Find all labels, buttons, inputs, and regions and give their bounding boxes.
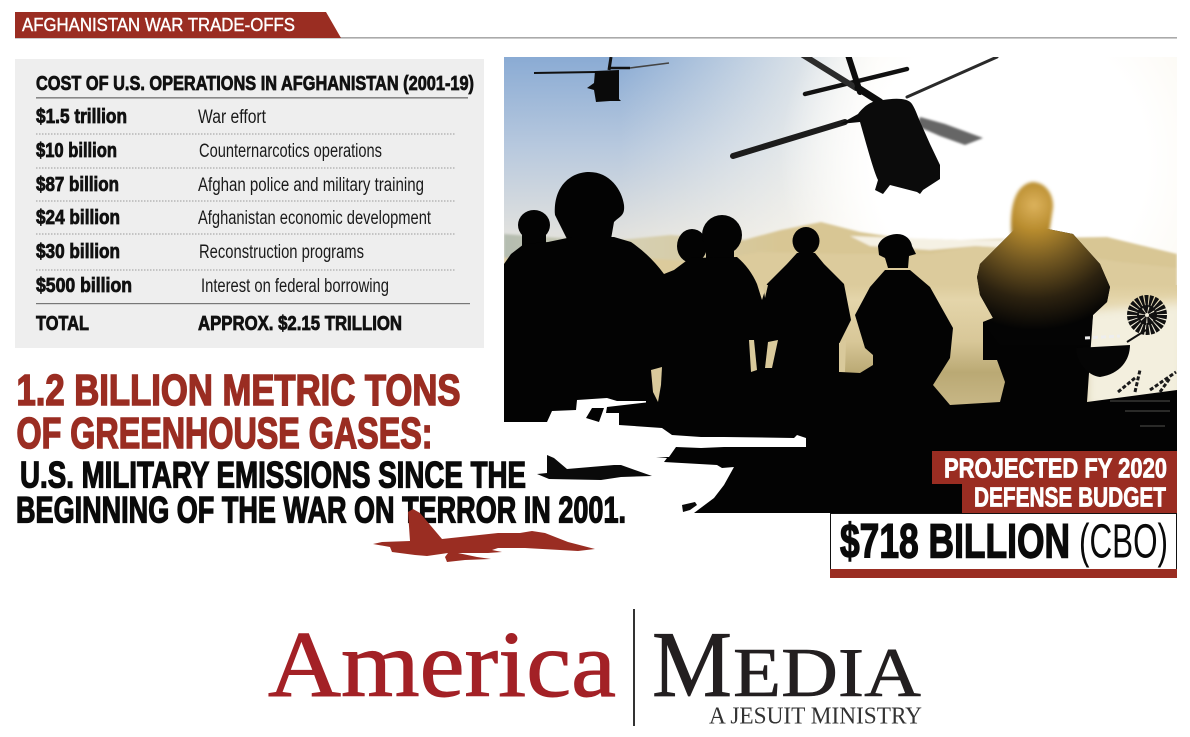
- row: counternarcotics: [36, 140, 382, 162]
- logo: America Media: [268, 609, 922, 730]
- logo: America Media: America: [268, 613, 616, 717]
- row: counternarcotics: Counternarcotics operations: [199, 141, 382, 162]
- row: police and military training: [36, 174, 424, 196]
- row: economic development: Afghanistan economic development: [198, 208, 432, 229]
- subheading: [16, 454, 626, 530]
- logo: America Media: M: [652, 613, 732, 717]
- tank debris mark: [682, 502, 697, 512]
- grass on ridge: [1118, 370, 1176, 392]
- callout: projected defense budget: [830, 451, 1177, 578]
- helmet carried: [1089, 345, 1130, 377]
- pale haze right of soldier: [1087, 298, 1177, 402]
- row: total: [36, 313, 402, 335]
- logo: America Media: EDIA: [733, 635, 921, 712]
- row: economic development: [36, 207, 432, 229]
- section ribbon: AFGHANISTAN WAR TRADE-OFFS: [22, 15, 295, 35]
- row: war effort: War effort: [198, 107, 267, 128]
- distant mountains: [504, 220, 1177, 294]
- section ribbon: [15, 12, 1177, 39]
- foreground ridge speckle: [1110, 400, 1170, 427]
- budget figure: $718 BILLION: [840, 516, 1070, 568]
- icon: small helicopter: [534, 57, 669, 102]
- row: total: APPROX. $2.15 TRILLION: [198, 313, 402, 335]
- photo: soldiers and helicopters at sunrise: [504, 55, 1185, 513]
- icon: large helicopter: [733, 55, 997, 194]
- subheading: U.S. MILITARY EMISSIONS SINCE THE: [20, 454, 526, 496]
- headline: OF GREENHOUSE GASES:: [16, 409, 432, 458]
- headline: [16, 366, 460, 458]
- row: total: TOTAL: [36, 313, 89, 335]
- headline: 1.2 BILLION METRIC TONS: [16, 366, 460, 415]
- row: police and military training: $87 billion: [36, 174, 119, 196]
- icon: black fighter jet: [537, 455, 652, 480]
- row: war effort: $1.5 trillion: [36, 106, 127, 128]
- row: reconstruction: [36, 241, 364, 263]
- soldiers silhouette: [504, 172, 1177, 513]
- row: interest: $500 billion: [36, 275, 132, 297]
- backlit soldier glow: [977, 180, 1110, 324]
- row: police and military training: Afghan police and military training: [198, 175, 424, 196]
- shrub: [1085, 301, 1161, 342]
- valley floor: [760, 285, 1177, 410]
- row: interest: Interest on federal borrowing: [201, 276, 389, 297]
- panel: cost table: [15, 59, 484, 348]
- row: war effort: [36, 106, 267, 128]
- table heading: COST OF U.S. OPERATIONS IN AFGHANISTAN (2001-19): [36, 72, 474, 95]
- soldiers bodies: [504, 229, 1177, 513]
- white tank silhouette: [504, 398, 806, 525]
- logo: America Media: A JESUIT MINISTRY: [709, 704, 922, 730]
- row: interest: [36, 275, 389, 297]
- row: counternarcotics: $10 billion: [36, 140, 117, 162]
- gaps between soldiers: [651, 285, 846, 402]
- row: reconstruction: Reconstruction programs: [199, 242, 364, 263]
- row: reconstruction: $30 billion: [36, 241, 120, 263]
- icon: red fighter jet: [373, 509, 595, 562]
- subheading: BEGINNING OF THE WAR ON TERROR IN 2001.: [16, 490, 626, 530]
- row: economic development: $24 billion: [36, 207, 120, 229]
